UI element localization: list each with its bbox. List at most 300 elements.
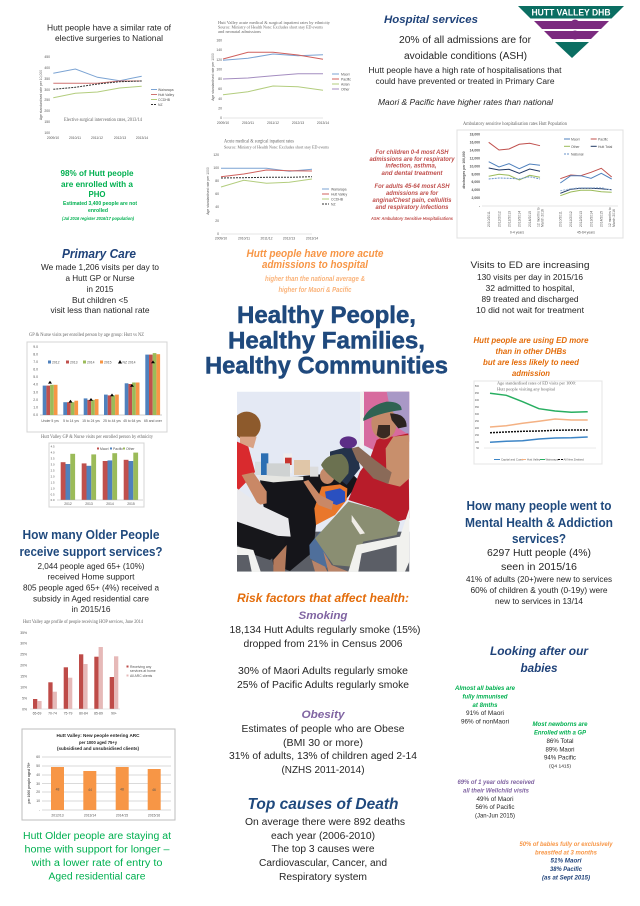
line chart: acute rates by DHB: [206, 140, 347, 240]
line chart: acute rates by ethnicity: Source: Ministry of Health Note: Excludes short stay ED events: [218, 24, 323, 30]
heading: mental health: services?: [512, 532, 566, 546]
bar chart: new people entering ARC: (subsidised and unsubsidised clients): [57, 746, 139, 752]
panel: mental health and addiction: [465, 499, 613, 606]
line chart: ambulatory sensitive hospitalisation rates: 2014/2015: [528, 211, 532, 227]
line chart: ambulatory sensitive hospitalisation rates: Maori: [571, 138, 580, 142]
bar chart: GP and nurse visits by age group: 5 to 14 yrs: [63, 419, 79, 423]
line chart: ambulatory sensitive hospitalisation rates: 2,000: [472, 196, 480, 200]
callout: ED use versus other DHBs: [474, 335, 589, 378]
line chart: acute rates by ethnicity: 2011/12: [267, 121, 279, 125]
bar chart: GP and nurse visits by age group: 15 to 24 yrs: [82, 419, 100, 423]
heading: babies: [490, 646, 589, 675]
text block: wellchild visits: all their Wellchild visits: [463, 788, 530, 794]
line chart: elective surgical rates: [39, 55, 174, 140]
text block: smoking facts: 18,134 Hutt Adults regularly smoke (15%): [230, 625, 420, 636]
line chart: acute rates by DHB: 2009/10: [215, 236, 227, 240]
text block: newborn enrolment: Enrolled with a GP: [534, 730, 587, 736]
line chart: ED visit rates: 100: [475, 441, 480, 444]
line chart: ambulatory sensitive hospitalisation rates: 10,000: [470, 164, 480, 168]
text block: ED numbers: 130 visits per day in 2015/16: [477, 273, 584, 282]
bar chart: new people entering ARC: -: [39, 808, 40, 812]
text block: newborn enrolment: 86% Total: [546, 739, 574, 745]
text block: newborn enrolment: [532, 722, 588, 768]
heading: elective surgeries: [47, 22, 172, 43]
line chart: ED visit rates: 250: [475, 420, 480, 423]
bar chart: GP and nurse visits by ethnicity: 2.5: [51, 468, 55, 472]
heading: older people: How many Older People: [22, 527, 160, 542]
line chart: elective surgical rates: CCDHB: [158, 98, 171, 102]
line chart: elective surgical rates: 400: [44, 66, 50, 70]
logo: Hutt Valley DHB: HUTT VALLEY DHB: [532, 8, 611, 18]
callout: more acute admissions: Hutt people have more acute: [246, 248, 384, 260]
line chart: ED visit rates: Capital and Coast: [501, 458, 523, 462]
text block: avoidable admissions: 20% of all admissions are for: [399, 35, 532, 46]
line chart: ambulatory sensitive hospitalisation rates: Ambulatory sensitive hospitalisation rates Hutt Population: [463, 122, 567, 127]
bar chart: GP and nurse visits by ethnicity: 2015: [127, 502, 135, 506]
bar chart: new people entering ARC: 40: [36, 773, 40, 777]
bar chart: GP and nurse visits by age group: 45 to 64 yrs: [123, 419, 141, 423]
text block: immunisation: fully immunised: [462, 694, 508, 700]
callout: ASH explanation: admissions are for respiratory: [370, 156, 455, 163]
text block: mental health numbers: [466, 548, 612, 606]
photo: health check at community event: [233, 392, 409, 572]
bar chart: GP and nurse visits by ethnicity: Pacific: [113, 447, 123, 451]
line chart: ambulatory sensitive hospitalisation rates: -: [479, 204, 480, 208]
text block: primary care visits: But children <5: [72, 295, 128, 305]
bar chart: GP and nurse visits by ethnicity: [41, 435, 153, 507]
bar chart: new people entering ARC: 60: [36, 755, 40, 759]
line chart: ambulatory sensitive hospitalisation rates: 12,000: [470, 156, 480, 160]
bar chart: HOP age profile: 65-69: [33, 712, 41, 716]
bar chart: HOP age profile: Receiving any: [130, 665, 152, 669]
line chart: ambulatory sensitive hospitalisation rates: discharges per 100,000: [462, 151, 466, 189]
text block: immunisation: 91% of Maori: [466, 711, 504, 717]
bar chart: GP and nurse visits by age group: 25 to 44 yrs: [103, 419, 121, 423]
bar chart: new people entering ARC: 48: [56, 788, 59, 792]
heading: mental health: [465, 499, 613, 546]
callout: ASH explanation: ASH: Ambulatory Sensitive Hospitalisations: [370, 216, 454, 221]
line chart: acute rates by DHB: 80: [215, 179, 219, 183]
bar chart: new people entering ARC: 20: [36, 790, 40, 794]
bar chart: GP and nurse visits by age group: 8.0: [33, 352, 38, 356]
text block: newborn enrolment: Most newborns are: [532, 722, 588, 728]
bar chart: GP and nurse visits by ethnicity: 2013: [85, 502, 93, 506]
text block: mental health numbers: new to services in 13/14: [495, 597, 584, 606]
line chart: elective surgical rates: Elective surgical intervention rates, 2013/14: [64, 118, 142, 123]
line chart: acute rates by DHB: 0: [217, 232, 219, 236]
line chart: ambulatory sensitive hospitalisation rates: 2010/2011: [487, 211, 491, 227]
line chart: acute rates by ethnicity: 2013/14: [317, 121, 329, 125]
text block: avoidable admissions: avoidable conditions (ASH): [404, 51, 527, 62]
callout: PHO enrolment: 98% of Hutt people: [60, 169, 134, 178]
line chart: ambulatory sensitive hospitalisation rates: Other: [571, 145, 580, 149]
bar chart: HOP age profile: 90+: [111, 712, 117, 716]
text block: newborn enrolment: 89% Maori: [546, 748, 574, 754]
bar chart: GP and nurse visits by ethnicity: 4.5: [51, 444, 55, 448]
bar chart: GP and nurse visits by age group: 65 and over: [144, 419, 163, 423]
bar chart: GP and nurse visits by ethnicity: 1.5: [51, 480, 55, 484]
bar chart: HOP age profile: 80-84: [79, 712, 88, 716]
text block: breastfeeding: 38% Pacific: [550, 867, 583, 873]
bar chart: new people entering ARC: 2015/16: [148, 814, 160, 818]
callout: PHO enrolment: PHO: [88, 190, 106, 199]
line chart: acute rates by ethnicity: Maori: [341, 72, 350, 76]
line chart: ambulatory sensitive hospitalisation rates: National: [571, 152, 584, 156]
bar chart: HOP age profile: [20, 620, 156, 716]
line chart: ED visit rates: 450: [475, 392, 480, 395]
line chart: acute rates by DHB: 2010/11: [238, 236, 250, 240]
text block: wellchild visits: 56% of Pacific: [476, 805, 514, 811]
text block: avoidable admissions: [368, 35, 562, 107]
bar chart: GP and nurse visits by ethnicity: 0.5: [51, 492, 55, 496]
line chart: acute rates by ethnicity: Asian: [341, 82, 350, 86]
text block: obesity facts: (BMI 30 or more): [283, 738, 363, 749]
text block: immunisation: Almost all babies are: [454, 686, 516, 692]
bar chart: new people entering ARC: 10: [36, 799, 40, 803]
callout: ASH explanation: angina/Chest pain, cellulitis: [372, 197, 452, 204]
bar chart: GP and nurse visits by age group: 2014: [87, 360, 95, 364]
bar chart: GP and nurse visits by ethnicity: Maori: [100, 447, 109, 451]
bar chart: new people entering ARC: 46: [152, 788, 156, 792]
callout: PHO enrolment: enrolled: [88, 208, 108, 214]
bar chart: new people entering ARC: per 1000 people aged 75+: [27, 762, 31, 804]
line chart: ambulatory sensitive hospitalisation rates: 16,000: [470, 140, 480, 144]
callout: ASH explanation: [370, 149, 455, 221]
panel: ED visits: [470, 260, 590, 378]
bar chart: new people entering ARC: 48: [120, 788, 124, 792]
bar chart: GP and nurse visits by age group: 5.0: [33, 375, 38, 379]
text block: causes of death: On average there were 892 deaths: [245, 817, 405, 828]
bar chart: new people entering ARC: 2014/15: [116, 814, 128, 818]
bar chart: HOP age profile: 5%: [22, 696, 27, 700]
line chart: elective surgical rates: Hutt Valley: [158, 93, 174, 97]
heading: older people: [20, 527, 163, 559]
callout: ED use versus other DHBs: than in other DHBs: [496, 346, 567, 356]
line chart: acute rates by DHB: CCDHB: [331, 198, 344, 202]
bar chart: GP and nurse visits by age group: NZ 2014: [122, 360, 136, 364]
line chart: elective surgical rates: 2012/13: [114, 136, 126, 140]
line chart: acute rates by ethnicity: 0: [220, 116, 222, 120]
text block: older people numbers: in 2015/16: [72, 604, 111, 614]
text block: ED numbers: [476, 273, 585, 315]
line chart: ED visit rates: [474, 380, 602, 464]
bar chart: HOP age profile: Hutt Valley age profile of people receiving HOP services, June 2014: [23, 620, 143, 625]
line chart: elective surgical rates: 450: [44, 55, 50, 59]
text block: older people numbers: 2,044 people aged 65+ (10%): [38, 561, 145, 571]
text block: mental health numbers: 41% of adults (20+)were new to services: [466, 575, 612, 584]
callout: older people staying at home: Hutt Older people are staying at: [23, 831, 171, 842]
text block: causes of death: The top 3 causes were: [272, 844, 375, 855]
bar chart: HOP age profile: 25%: [20, 652, 27, 656]
callout: older people staying at home: with a lower rate of entry to: [30, 858, 163, 869]
line chart: elective surgical rates: 2011/12: [91, 136, 103, 140]
line chart: elective surgical rates: 2010/11: [69, 136, 81, 140]
line chart: ED visit rates: Age standardised rates of ED visits per 1000:: [497, 380, 576, 386]
line chart: acute rates by ethnicity: Pacific: [341, 78, 351, 82]
bar chart: new people entering ARC: Hutt Valley: New people entering ARC: [56, 733, 140, 739]
line chart: ambulatory sensitive hospitalisation rates: 45-64 years: [577, 230, 595, 234]
text block: primary care visits: in 2015: [86, 284, 114, 294]
text block: wellchild visits: 49% of Maori: [476, 797, 514, 803]
line chart: ambulatory sensitive hospitalisation rates: 12 months to: [608, 207, 612, 227]
callout: ED use versus other DHBs: admission: [512, 368, 550, 378]
bar chart: HOP age profile: All ARC clients: [130, 674, 153, 678]
line chart: ambulatory sensitive hospitalisation rates: 2010/2011: [559, 211, 563, 227]
panel: top causes of death: [245, 796, 405, 883]
line chart: elective surgical rates: Age standardised rate per 10,000: [39, 70, 43, 120]
callout: more acute admissions: admissions to hospital: [262, 259, 369, 271]
heading: primary care: Primary Care: [62, 247, 136, 261]
line chart: acute rates by DHB: NZ: [331, 202, 336, 206]
line chart: ED visit rates: 50: [476, 447, 480, 450]
panel: hospital services: [368, 14, 562, 107]
line chart: acute rates by ethnicity: 20: [218, 106, 222, 110]
title: Healthy Communities: [205, 352, 448, 380]
line chart: acute rates by DHB: Age standardised rate per 1000: [206, 167, 210, 215]
callout: PHO enrolment: (Jul 2016 register 2016/17 population): [62, 216, 134, 221]
bar chart: HOP age profile: services at home: [130, 669, 156, 673]
callout: more acute admissions: higher than the national average &: [265, 276, 365, 283]
line chart: ED visit rates: All New Zealand: [564, 458, 584, 462]
line chart: acute rates by ethnicity: 160: [216, 38, 222, 42]
bar chart: GP and nurse visits by ethnicity: Hutt Valley GP & Nurse visits per enrolled person by ethnicity: [41, 435, 153, 440]
line chart: acute rates by DHB: 2011/12: [260, 236, 273, 240]
line chart: acute rates by DHB: 100: [213, 166, 219, 170]
heading: elective surgeries: Hutt people have a similar rate of: [47, 22, 172, 32]
callout: ASH explanation: admissions are for: [386, 190, 439, 197]
line chart: acute rates by ethnicity: 2010/11: [242, 121, 254, 125]
line chart: ambulatory sensitive hospitalisation rates: 14,000: [470, 148, 480, 152]
line chart: ambulatory sensitive hospitalisation rates: Hutt Total: [598, 145, 613, 149]
text block: obesity facts: [229, 724, 417, 776]
callout: PHO enrolment: Estimated 3,400 people are not: [63, 201, 137, 207]
line chart: ambulatory sensitive hospitalisation rates: 0-4 years: [510, 230, 524, 234]
text block: wellchild visits: [458, 780, 535, 820]
line chart: ED visit rates: 300: [475, 413, 480, 416]
line chart: elective surgical rates: 350: [44, 77, 50, 81]
bar chart: GP and nurse visits by age group: 2012: [52, 360, 60, 364]
line chart: ambulatory sensitive hospitalisation rates: 8,000: [472, 172, 480, 176]
line chart: ED visit rates: 500: [475, 385, 480, 388]
text block: primary care visits: visit less than national rate: [50, 305, 150, 315]
callout: ASH explanation: For adults 45-64 most ASH: [374, 183, 450, 190]
line chart: acute rates by ethnicity: 140: [216, 48, 222, 52]
callout: PHO enrolment: [60, 169, 137, 221]
bar chart: new people entering ARC: 44: [88, 788, 92, 792]
line chart: ambulatory sensitive hospitalisation rates: 6,000: [472, 180, 480, 184]
text block: newborn enrolment: (Q4 1415): [549, 764, 572, 768]
text block: primary care visits: We made 1,206 visits per day to: [41, 262, 159, 272]
text block: breastfeeding: (as at Sept 2015): [542, 876, 590, 882]
line chart: ambulatory sensitive hospitalisation rates: 2011/2012: [497, 211, 501, 227]
heading: babies: Looking after our: [490, 646, 589, 658]
heading: ED visits: Visits to ED are increasing: [470, 260, 590, 271]
heading: hospital services: Hospital services: [384, 14, 478, 26]
text block: older people numbers: received Home support: [48, 572, 135, 582]
heading: mental health: Mental Health & Addiction: [465, 516, 613, 530]
bar chart: HOP age profile: 35%: [20, 631, 27, 635]
line chart: ED visit rates: Hutt people visiting any hospital: [497, 386, 556, 392]
text block: wellchild visits: 69% of 1 year olds received: [458, 780, 535, 786]
heading: mental health: How many people went to: [466, 499, 612, 513]
line chart: acute rates by DHB: 120: [213, 153, 219, 157]
text block: ED numbers: 89 treated and discharged: [482, 295, 578, 304]
text block: older people numbers: subsidy in Aged residential care: [33, 594, 149, 604]
bar chart: GP and nurse visits by age group: 2.0: [33, 398, 38, 402]
bar chart: GP and nurse visits by age group: 6.0: [33, 368, 38, 372]
bar chart: GP and nurse visits by age group: 1.0: [33, 405, 38, 409]
bar chart: HOP age profile: 10%: [20, 686, 27, 690]
bar chart: HOP age profile: 20%: [20, 664, 27, 668]
text block: causes of death: Respiratory system: [279, 872, 367, 883]
text block: breastfeeding: breastfed at 3 months: [535, 850, 598, 856]
title: Healthy People,: [237, 302, 416, 329]
panel: older people support: [20, 527, 163, 614]
callout: older people staying at home: home with support for longer –: [24, 844, 170, 856]
line chart: acute rates by ethnicity: Hutt Valley acute medical & surgical inpatient rates by ethnicity: [218, 20, 331, 25]
bar chart: GP and nurse visits by ethnicity: 2.0: [51, 474, 55, 478]
bar chart: new people entering ARC: 2012/13: [51, 814, 64, 818]
bar chart: HOP age profile: 30%: [20, 642, 27, 646]
line chart: acute rates by ethnicity: 100: [216, 68, 222, 72]
line chart: acute rates by DHB: 20: [215, 219, 219, 223]
line chart: acute rates by ethnicity: and neonatal admissions: [218, 29, 261, 34]
line chart: elective surgical rates: Wairarapa: [158, 88, 174, 92]
text block: newborn enrolment: 94% Pacific: [544, 756, 576, 762]
line chart: acute rates by ethnicity: Other: [341, 88, 350, 92]
text block: breastfeeding: 51% Maori: [550, 858, 582, 864]
callout: ED use versus other DHBs: but are less likely to need: [483, 357, 580, 367]
line chart: ambulatory sensitive hospitalisation rates: [457, 122, 623, 238]
line chart: acute rates by ethnicity: Age standardised rate per 1000: [211, 53, 215, 101]
text block: avoidable admissions: could have prevented or treated in Primary Care: [376, 77, 555, 86]
bar chart: GP and nurse visits by ethnicity: 4.0: [51, 450, 55, 454]
line chart: acute rates by DHB: Source: Ministry of Health Note: Excludes short stay ED events: [224, 144, 329, 150]
text block: primary care visits: a Hutt GP or Nurse: [66, 273, 135, 283]
heading: smoking: Smoking: [298, 610, 348, 622]
bar chart: new people entering ARC: per 1000 aged 75+y: [79, 740, 117, 746]
callout: older people staying at home: [23, 831, 171, 882]
text block: mental health numbers: 6297 Hutt people (4%): [487, 548, 591, 559]
line chart: ambulatory sensitive hospitalisation rates: 12 months to: [536, 207, 540, 227]
bar chart: GP and nurse visits by age group: GP & Nurse visits per enrolled person by age group: Hutt vs NZ: [29, 333, 144, 338]
text block: older people numbers: [23, 561, 159, 614]
line chart: acute rates by DHB: 60: [215, 192, 219, 196]
text block: causes of death: Cardiovascular, Cancer, and: [259, 858, 387, 869]
text block: avoidable admissions: Maori & Pacific have higher rates than national: [378, 98, 553, 107]
bar chart: GP and nurse visits by age group: 7.0: [33, 360, 38, 364]
bar chart: new people entering ARC: 2013/14: [84, 814, 96, 818]
text block: smoking facts: dropped from 21% in Census 2006: [244, 639, 403, 650]
panel: looking after our babies: [454, 646, 613, 882]
heading: obesity: Obesity: [302, 709, 345, 721]
line chart: ED visit rates: 200: [475, 427, 480, 430]
line chart: elective surgical rates: 100: [44, 131, 50, 135]
bar chart: GP and nurse visits by age group: 2013: [70, 360, 78, 364]
bar chart: new people entering ARC: [22, 729, 175, 820]
text block: immunisation: 96% of nonMaori: [461, 720, 509, 726]
bar chart: GP and nurse visits by age group: 9.0: [33, 345, 38, 349]
line chart: acute rates by ethnicity: 120: [216, 58, 222, 62]
text block: obesity facts: 31% of adults, 13% of children aged 2-14: [229, 751, 417, 762]
heading: elective surgeries: elective surgeries to National: [55, 33, 163, 43]
text block: immunisation: [454, 686, 516, 726]
text block: ED numbers: 32 admitted to hospital,: [486, 284, 574, 293]
text block: ED numbers: 10 did not wait for treatment: [476, 306, 585, 315]
bar chart: GP and nurse visits by ethnicity: 2012: [64, 502, 72, 506]
heading: top causes of death: Top causes of Death: [248, 796, 398, 813]
line chart: ambulatory sensitive hospitalisation rates: 18,000: [470, 132, 480, 136]
bar chart: GP and nurse visits by age group: Under 5 yrs: [41, 419, 59, 423]
text block: primary care visits: [41, 262, 159, 315]
text block: avoidable admissions: Hutt people have a high rate of hospitalisations that: [368, 66, 562, 75]
callout: ASH explanation: and dental treatment: [382, 170, 443, 177]
line chart: ambulatory sensitive hospitalisation rates: 4,000: [472, 188, 480, 192]
line chart: ED visit rates: Hutt Valley: [527, 458, 541, 462]
text block: smoking facts: 25% of Pacific Adults regularly smoke: [237, 680, 409, 691]
line chart: acute rates by ethnicity: 2012/13: [292, 121, 304, 125]
text block: causes of death: each year (2006-2010): [271, 831, 375, 842]
bar chart: new people entering ARC: 30: [36, 782, 40, 786]
bar chart: HOP age profile: 75-79: [64, 712, 72, 716]
line chart: acute rates by ethnicity: 80: [218, 77, 222, 81]
heading: babies: babies: [520, 663, 558, 675]
bar chart: GP and nurse visits by age group: 0.0: [33, 413, 38, 417]
line chart: ED visit rates: Wairarapa: [546, 458, 559, 462]
line chart: acute rates by ethnicity: 2009/10: [217, 121, 229, 125]
callout: ASH explanation: and respiratory infections: [376, 204, 449, 211]
text block: smoking facts: 30% of Maori Adults regularly smoke: [238, 666, 408, 677]
callout: older people staying at home: Aged residential care: [48, 872, 146, 882]
line chart: ED visit rates: 150: [475, 434, 480, 437]
bar chart: HOP age profile: 70-74: [48, 712, 57, 716]
text block: causes of death: [245, 817, 405, 883]
text block: smoking facts: [230, 625, 420, 691]
line chart: ambulatory sensitive hospitalisation rates: 2013/2014: [589, 211, 593, 227]
bar chart: HOP age profile: 15%: [20, 674, 27, 678]
line chart: elective surgical rates: NZ: [158, 103, 163, 107]
bar chart: GP and nurse visits by ethnicity: 3.0: [51, 462, 55, 466]
line chart: ambulatory sensitive hospitalisation rates: 2011/2012: [569, 211, 573, 227]
bar chart: GP and nurse visits by ethnicity: 0.0: [51, 498, 55, 502]
panel: primary care: [41, 247, 159, 315]
line chart: ambulatory sensitive hospitalisation rates: Pacific: [598, 138, 608, 142]
bar chart: GP and nurse visits by age group: [27, 333, 167, 432]
bar chart: GP and nurse visits by age group: 4.0: [33, 383, 38, 387]
bar chart: GP and nurse visits by ethnicity: Other: [126, 447, 135, 451]
text block: breastfeeding: 50% of babies fully or exclusively: [520, 842, 613, 848]
callout: more acute admissions: [246, 248, 384, 294]
line chart: ambulatory sensitive hospitalisation rates: 2012/2013: [579, 211, 583, 227]
callout: ED use versus other DHBs: Hutt people are using ED more: [474, 335, 589, 345]
bar chart: GP and nurse visits by ethnicity: 1.0: [51, 486, 55, 490]
line chart: ambulatory sensitive hospitalisation rates: March 2016: [612, 209, 616, 227]
line chart: ED visit rates: 350: [475, 406, 480, 409]
line chart: ambulatory sensitive hospitalisation rates: 2012/2013: [507, 211, 511, 227]
text block: immunisation: at 8mths: [472, 703, 498, 709]
callout: PHO enrolment: are enrolled with a: [61, 180, 134, 189]
text block: wellchild visits: (Jan-Jun 2015): [475, 814, 515, 820]
panel: risk factors: [229, 593, 420, 776]
heading: risk factors: Risk factors that affect health:: [237, 593, 409, 605]
heading: older people: receive support services?: [20, 544, 163, 559]
line chart: elective surgical rates: 2009/10: [47, 136, 59, 140]
line chart: elective surgical rates: 300: [44, 88, 50, 92]
text block: breastfeeding: [520, 842, 613, 882]
line chart: acute rates by DHB: 40: [215, 205, 219, 209]
line chart: elective surgical rates: 250: [44, 98, 50, 102]
line chart: elective surgical rates: 200: [44, 109, 50, 113]
